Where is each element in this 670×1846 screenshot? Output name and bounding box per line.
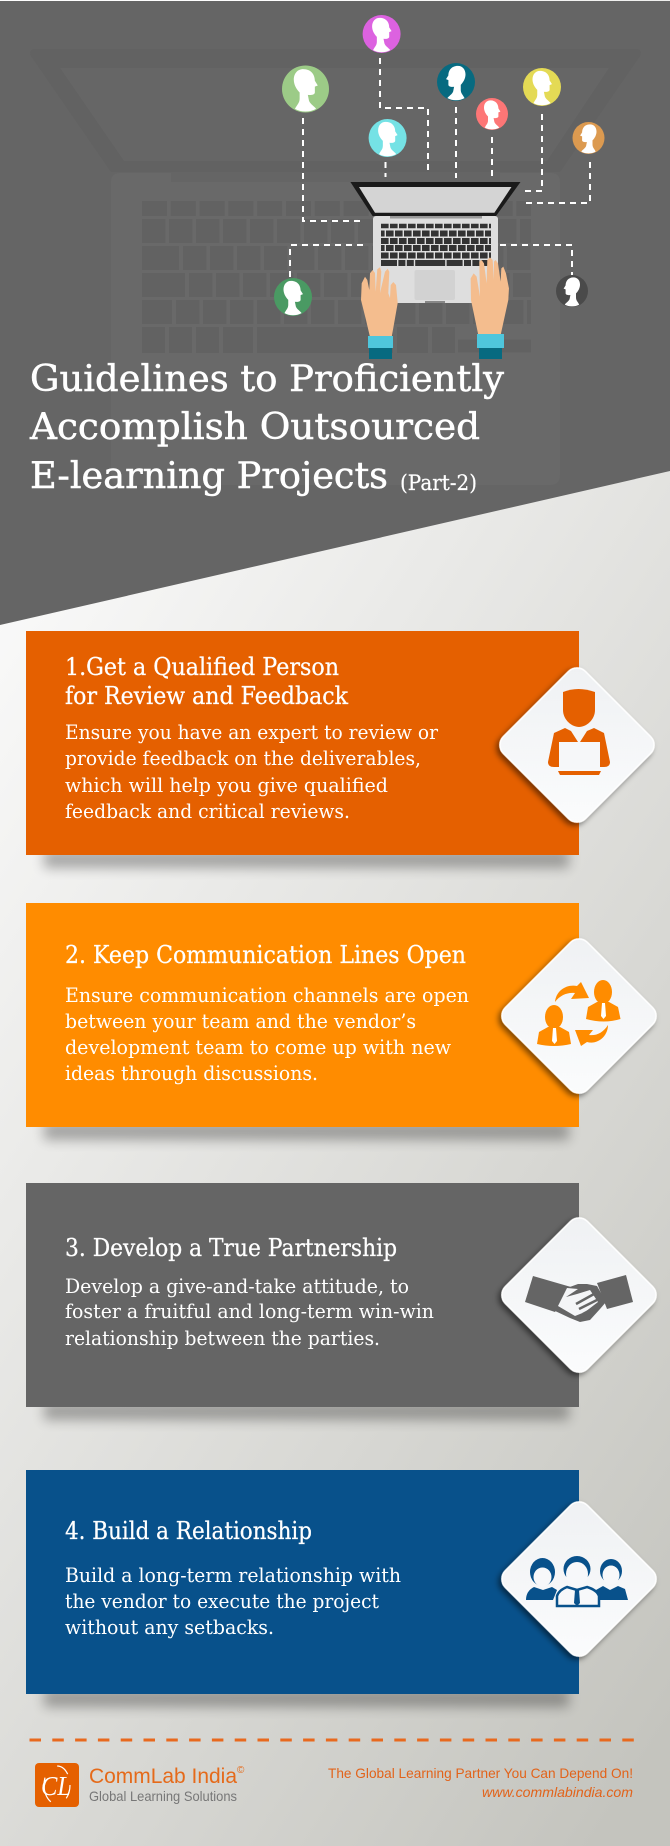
step 4 body: the vendor to execute the project xyxy=(65,1590,379,1613)
logo: © xyxy=(237,1765,245,1776)
step 3 body: foster a fruitful and long-term win-win xyxy=(65,1300,434,1323)
laptop illustration xyxy=(350,182,520,303)
step 1 body: which will help you give qualified xyxy=(65,774,388,797)
step 1 body: Ensure you have an expert to review or xyxy=(65,721,439,744)
title: Guidelines to Proficiently xyxy=(30,359,505,400)
step 3 body xyxy=(65,1275,434,1350)
step 4 body xyxy=(65,1564,401,1639)
step 1 heading: 1.Get a Qualified Person xyxy=(65,653,339,681)
icon: handshake xyxy=(497,1213,661,1377)
logo: CL xyxy=(41,1771,71,1801)
step 1 body: feedback and critical reviews. xyxy=(65,800,350,823)
step 1 body: provide feedback on the deliverables, xyxy=(65,747,421,770)
tagline: The Global Learning Partner You Can Depend On! xyxy=(328,1765,633,1781)
step 3 body: relationship between the parties. xyxy=(65,1327,380,1350)
panel: step 1 xyxy=(26,631,659,868)
avatar: magenta xyxy=(363,15,401,53)
title: Accomplish Outsourced xyxy=(29,407,480,448)
step 1 heading xyxy=(65,653,348,710)
icon: communication exchange xyxy=(497,934,661,1098)
icon: person at laptop xyxy=(495,663,659,827)
title: (Part-2) xyxy=(400,471,477,495)
tagline xyxy=(328,1765,633,1800)
step 4 body: without any setbacks. xyxy=(65,1616,274,1639)
step 2 body: Ensure communication channels are open xyxy=(65,984,469,1007)
header dark panel xyxy=(0,1,670,625)
avatar: charcoal xyxy=(556,275,588,307)
avatar: light green xyxy=(282,66,329,112)
dashed connector lines xyxy=(290,58,590,277)
avatar: coral xyxy=(476,98,508,130)
avatar: dark green xyxy=(274,278,312,316)
step 2 heading: 2. Keep Communication Lines Open xyxy=(65,941,466,969)
left hand xyxy=(361,267,398,359)
footer divider xyxy=(30,1738,634,1742)
avatar: cyan xyxy=(369,119,407,157)
icon: team of three xyxy=(497,1497,661,1661)
tagline: www.commlabindia.com xyxy=(482,1784,633,1800)
step 4 heading: 4. Build a Relationship xyxy=(65,1517,312,1545)
step 2 body xyxy=(65,984,469,1085)
logo: Global Learning Solutions xyxy=(89,1788,237,1804)
panel: step 3 xyxy=(26,1183,661,1420)
right hand xyxy=(471,257,509,359)
step 3 heading: 3. Develop a True Partnership xyxy=(65,1234,397,1262)
panel: step 2 xyxy=(26,903,661,1140)
step 2 body: ideas through discussions. xyxy=(65,1062,318,1085)
step 3 body: Develop a give-and-take attitude, to xyxy=(65,1275,409,1298)
avatar: dark teal xyxy=(437,63,475,101)
avatar: yellow xyxy=(523,68,561,106)
step 2 body: development team to come up with new xyxy=(65,1036,451,1059)
step 1 heading: for Review and Feedback xyxy=(65,682,348,710)
step 4 body: Build a long-term relationship with xyxy=(65,1564,401,1587)
title: E-learning Projects xyxy=(30,456,388,497)
title xyxy=(29,359,505,497)
step 2 body: between your team and the vendor’s xyxy=(65,1010,416,1033)
logo xyxy=(35,1763,245,1807)
step 1 body xyxy=(65,721,439,823)
watermark laptop xyxy=(30,49,641,485)
avatar: tan xyxy=(572,122,604,154)
logo: CommLab India xyxy=(89,1765,237,1788)
panel: step 4 xyxy=(26,1470,661,1707)
